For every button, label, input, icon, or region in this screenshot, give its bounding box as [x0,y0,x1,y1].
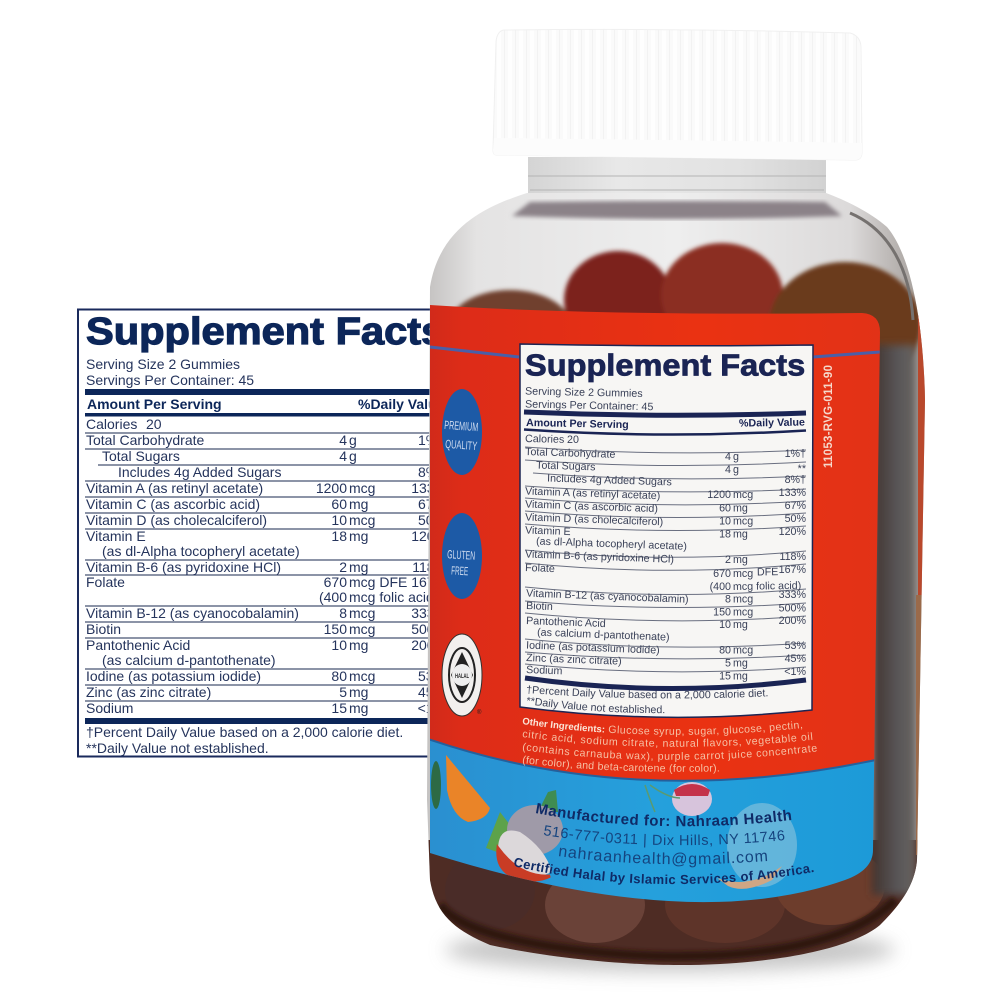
footnotes: **Daily Value not established. [86,740,269,756]
amounts: (400 [319,589,347,605]
label percentages: 50% [785,513,806,525]
nutrient names [86,416,300,716]
nutrient names: Total Sugars [102,448,180,464]
amounts: mcg [349,512,375,528]
label amounts: 670 [713,568,731,580]
icon: strawberry [486,790,563,880]
blue label band [430,738,874,902]
daily value percentages: 1%† [418,432,446,448]
nutrient names: Vitamin C (as ascorbic acid) [86,496,260,512]
label footnotes: **Daily Value not established. [527,696,664,714]
table header: Amount Per Serving [87,396,222,412]
amounts: 15 [331,700,347,716]
amounts: 80 [331,668,347,684]
nutrient names: Folate [86,574,125,590]
nutrient names: (as dl-Alpha tocopheryl acetate) [102,543,300,559]
gummy: far left [454,286,569,312]
badge: gluten free: FREE [451,563,469,578]
label percentages: 333% [779,589,806,601]
daily value percentages: 500% [411,621,447,637]
nutrient names: Vitamin D (as cholecalciferol) [86,512,267,528]
label percentages: 500% [779,602,806,614]
label nutrient names: Vitamin E [525,525,571,538]
label amounts: 10 [719,516,731,528]
label amounts: 18 [719,528,731,540]
label percentages: 120% [779,526,806,538]
icon: cherry [645,782,712,816]
bottle [427,157,925,965]
label percentages: 133% [779,487,806,499]
nutrient names: Vitamin E [86,528,146,544]
daily value percentages: 50% [418,512,446,528]
amounts: 2 [339,559,347,575]
label amounts: mcg folic acid) [733,580,801,593]
label percentages: ** [798,463,806,475]
daily value percentages: 8%† [418,464,446,480]
amounts: mcg DFE 167% [349,574,447,590]
footnotes: †Percent Daily Value based on a 2,000 calorie diet. [86,724,403,740]
manufacturer details: nahraanhealth@gmail.com [559,847,768,868]
badge: premium quality [442,389,482,475]
label nutrient names: Folate [525,562,555,575]
amounts: mcg [349,480,375,496]
label percentages: 67% [785,500,806,512]
label amounts: 15 [719,670,731,682]
label table header: %Daily Value [739,417,805,430]
daily value percentages: 67% [418,496,446,512]
amounts: g [349,448,357,464]
amounts: 4 [339,448,347,464]
label nutrient names: Vitamin A (as retinyl acetate) [525,486,660,502]
amounts: mg [349,700,368,716]
label nutrient names: Vitamin B-6 (as pyridoxine HCl) [525,549,674,566]
label amounts: mcg [733,606,753,618]
amounts [316,436,428,716]
amounts: 8 [339,605,347,621]
daily value percentages: 333% [411,605,447,621]
panel: enlarged supplement facts [77,308,430,758]
label percentages: 45% [785,653,806,665]
daily value percentages [412,436,430,713]
label footnotes [527,686,768,714]
label nutrient names: Vitamin D (as cholecalciferol) [525,512,663,528]
manufacturer details: 516-777-0311 | Dix Hills, NY 11746 [544,825,784,848]
label nutrient names: Total Sugars [536,460,596,473]
label amounts: g [733,451,739,463]
label amounts: mcg [733,568,753,580]
daily value percentages: 118% [412,559,447,575]
nutrient names: Pantothenic Acid [86,637,190,653]
label nutrient names: Biotin [526,600,553,613]
nutrient names: Iodine (as potassium iodide) [86,668,261,684]
label serving information: Servings Per Container: 45 [525,399,654,413]
label percentages: 1%† [785,448,806,460]
footnotes [86,724,403,756]
label nutrient names: Calories [525,433,564,446]
other ingredients: (contains carnauba wax), purple carrot juice concentrate [522,742,817,762]
daily value percentages: 120% [411,528,447,544]
label table header: Amount Per Serving [526,417,629,431]
label nutrient names: Pantothenic Acid [526,615,606,630]
badge: gluten free [442,513,482,599]
product code: 11053-RVG-011-90 [823,365,835,468]
amounts: mcg [349,621,375,637]
amounts: 60 [331,496,347,512]
label serving information [526,387,653,410]
amounts: mg [349,496,368,512]
serving information: Servings Per Container: 45 [86,372,254,388]
label footnotes: †Percent Daily Value based on a 2,000 calorie diet. [527,686,768,700]
other ingredients: (for color), and beta-carotene (for color). [522,756,719,774]
label nutrient names: Vitamin B-12 (as cyanocobalamin) [526,588,689,606]
amounts: mg [349,684,368,700]
label percentages: 200% [779,615,806,627]
label amounts: 8 [725,594,731,606]
label amounts: DFE [757,566,778,578]
label nutrient names: Sodium [526,664,563,677]
bottle shadow [445,928,895,972]
label amounts: 4 [725,464,731,476]
daily value percentages: <1% [418,700,446,716]
label nutrient names: (as calcium d-pantothenate) [537,627,670,644]
daily value percentages: 53% [418,668,446,684]
bottle cap [493,29,862,160]
amounts: mg [349,559,368,575]
contents: gummies and shoulder [425,201,926,965]
label serving information: Serving Size 2 Gummies [525,386,643,400]
label amounts: mcg [733,594,753,606]
label amounts [707,451,801,682]
red label area [425,300,885,800]
serving information [86,359,254,388]
manufacturer details: Manufactured for: Nahraan Health [536,803,792,826]
amounts: mcg [349,668,375,684]
badge: halal seal [442,634,482,716]
label table rules [524,412,806,689]
label [430,305,880,902]
label amounts: (400 [710,581,731,593]
label percentages: 118% [779,551,806,563]
label amounts: 60 [719,502,731,514]
label amounts: mg [733,670,748,682]
badge: premium quality: PREMIUM [444,418,479,434]
gummy: right [769,258,921,356]
icon: orange slice [446,755,490,822]
amounts: 4 [339,432,347,448]
amounts: mg [349,637,368,653]
amounts: mcg [349,605,375,621]
label amounts: 150 [713,606,731,618]
nutrient names: Vitamin B-12 (as cyanocobalamin) [86,605,299,621]
label nutrient names: 20 [567,434,579,446]
amounts: 18 [331,528,347,544]
label amounts: 10 [719,619,731,631]
label percentages: 8%† [785,474,806,486]
label nutrient names: Includes 4g Added Sugars [547,473,672,488]
label amounts: mg [733,554,748,566]
amounts: 5 [339,684,347,700]
label nutrient names: Iodine (as potassium iodide) [526,640,660,657]
other ingredients: Other Ingredients: Glucose syrup, sugar, glucose, pectin, [522,718,802,737]
label heading: Supplement Facts [525,347,805,382]
table rules [85,389,430,724]
gummy: centre [662,240,786,314]
label nutrient names [525,433,689,677]
table header: %Daily Value [358,396,445,412]
amounts: 10 [331,512,347,528]
nutrient names: Vitamin B-6 (as pyridoxine HCl) [86,559,281,575]
nutrient names: Total Carbohydrate [86,432,205,448]
label nutrient names: Vitamin C (as ascorbic acid) [525,499,658,515]
manufacturer details [514,803,814,885]
bottle neck [528,157,826,203]
nutrient names: Includes 4g Added Sugars [118,464,281,480]
amounts: mcg folic acid) [349,589,438,605]
other ingredients [522,718,817,774]
label amounts: 2 [725,554,731,566]
heading: supplement facts: Supplement Facts [86,311,444,353]
label amounts: 5 [725,658,731,670]
badge: gluten free: GLUTEN [447,547,476,563]
amounts: 670 [324,574,347,590]
table header [87,399,430,412]
nutrient names: Biotin [86,621,121,637]
label amounts: 80 [719,644,731,656]
label amounts: mcg [733,644,753,656]
amounts: 10 [331,637,347,653]
daily value percentages: 200% [411,637,447,653]
bottle body glass [427,193,925,965]
daily value percentages: 45% [418,684,446,700]
panel: label supplement facts [519,343,814,718]
label nutrient names: Total Carbohydrate [525,446,616,461]
label amounts: mcg [733,489,753,501]
label amounts: mcg [733,516,753,528]
daily value percentages: 133% [411,480,447,496]
badge: halal seal: HALAL [455,674,469,680]
lower gummies [425,840,920,965]
blue label stripe [430,347,880,357]
icon: leaf [431,761,441,809]
label amounts: mg [733,658,748,670]
nutrient names: Zinc (as zinc citrate) [86,684,211,700]
label percentages: <1% [784,666,806,678]
label amounts: mg [733,619,748,631]
label nutrient names: (as dl-Alpha tocopheryl acetate) [536,536,687,553]
nutrient names: Calories [86,416,137,432]
manufacturer details: Certified Halal by Islamic Services of America. [514,858,814,885]
label percentages: 167% [779,564,806,576]
badge: halal seal: ® [477,709,482,716]
amounts: 150 [324,621,347,637]
label nutrient names: Zinc (as zinc citrate) [526,652,622,668]
badge: premium quality: QUALITY [445,437,478,453]
nutrient names: 20 [146,416,162,432]
label percentages: 53% [785,640,806,652]
icon: melon [717,803,797,889]
nutrient names: Sodium [86,700,133,716]
label percentages [779,448,806,678]
label amounts: 4 [725,451,731,463]
nutrient names: Vitamin A (as retinyl acetate) [86,480,263,496]
label table header [526,418,804,430]
label amounts: 1200 [707,489,731,501]
amounts: mg [349,528,368,544]
serving information: Serving Size 2 Gummies [86,356,240,372]
label amounts: g [733,464,739,476]
amounts: 1200 [316,480,347,496]
other ingredients: citric acid, sodium citrate, natural flavors, vegetable oil [522,730,812,748]
amounts: g [349,432,357,448]
gummy: left [560,248,669,314]
label amounts: mg [733,502,748,514]
nutrient names: (as calcium d-pantothenate) [102,652,276,668]
label amounts: mg [733,528,748,540]
